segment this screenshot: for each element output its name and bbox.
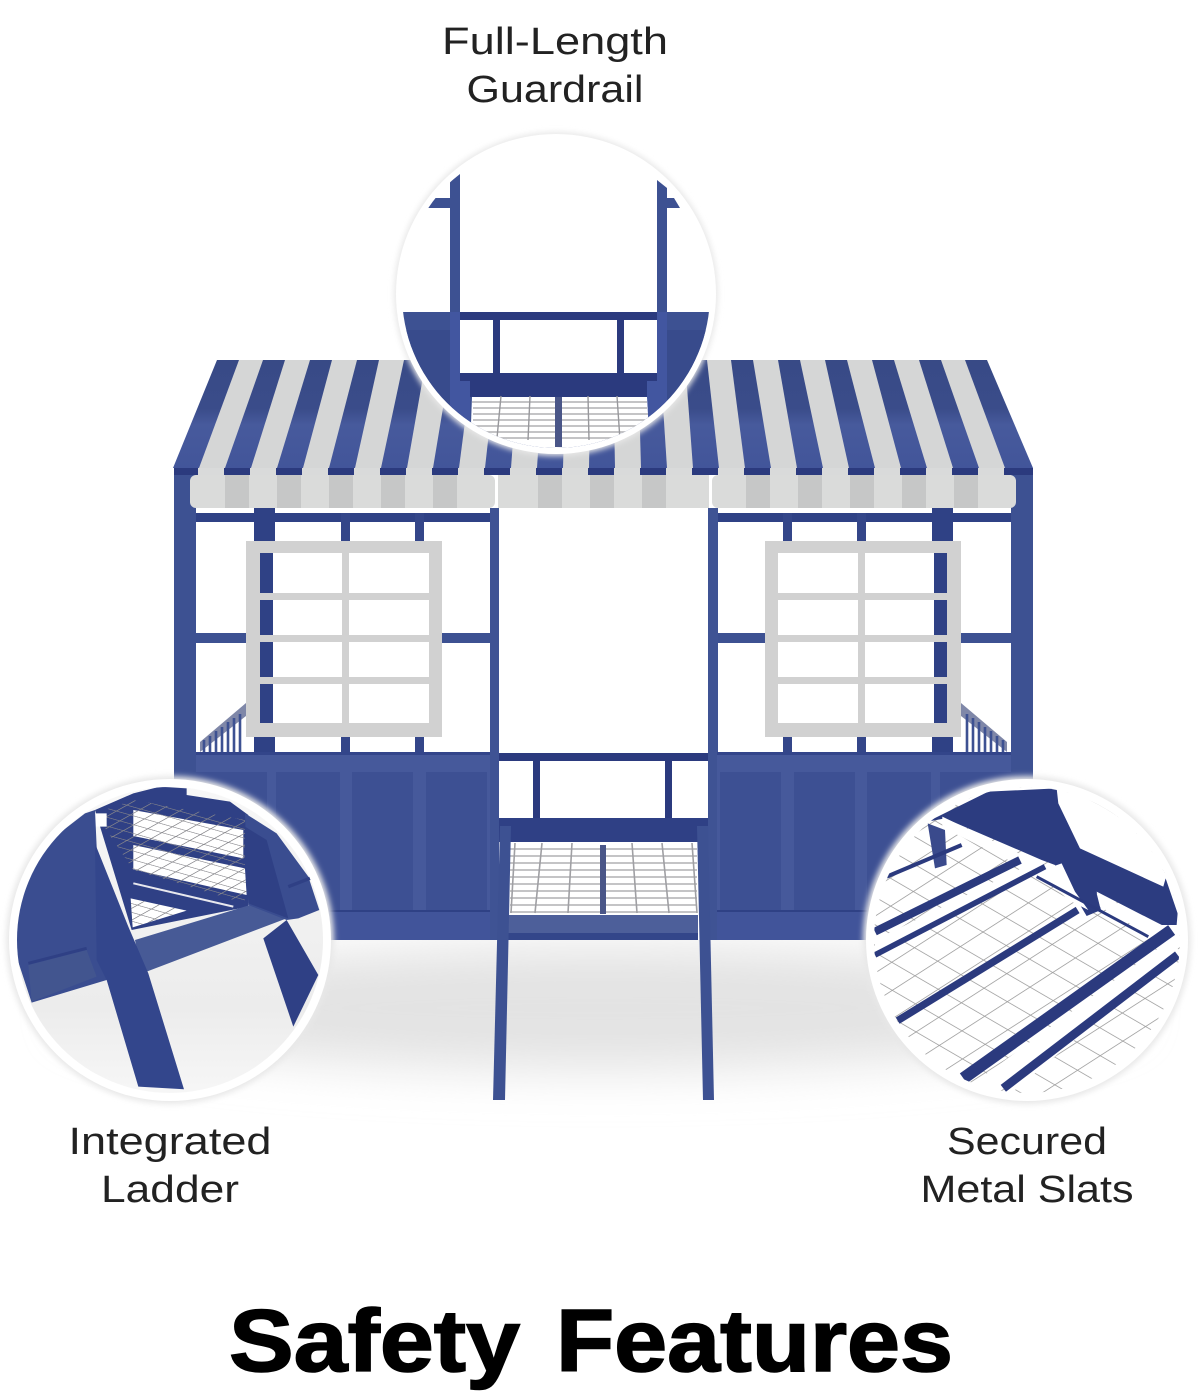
- bed illustration: [173, 360, 1033, 1100]
- side frame: right: [708, 468, 1033, 940]
- center opening and guard rail: [499, 753, 708, 940]
- left panel: [10, 810, 107, 1003]
- callout circle: full-length guardrail: [394, 130, 725, 462]
- front beam: [135, 905, 287, 972]
- label: ladder line: Ladder: [101, 1169, 239, 1211]
- title: Features: [556, 1291, 953, 1390]
- railing right: [961, 703, 1007, 752]
- callout circle: secured metal slats: [863, 775, 1191, 1105]
- title: [229, 1291, 953, 1390]
- label: metal slats: Metal Slats: [920, 1169, 1134, 1211]
- lower panel right: [717, 752, 1011, 940]
- railing: [200, 703, 246, 752]
- right side: [245, 813, 319, 920]
- label: secured: Secured: [947, 1121, 1107, 1163]
- window: left: [246, 541, 442, 737]
- valance: [190, 475, 1016, 508]
- label: integrated ladder: Integrated: [68, 1121, 272, 1163]
- floor shadow: [70, 946, 1130, 1070]
- heading: full-length guardrail: Full-Length: [442, 21, 668, 63]
- side frame: left: [174, 468, 499, 940]
- ladder front rail: [95, 843, 184, 1089]
- roof canopy: [173, 360, 1033, 475]
- heading: guardrail line: Guardrail: [466, 69, 644, 111]
- title: Safety: [229, 1291, 520, 1390]
- window: right: [765, 541, 961, 737]
- lower panel: [196, 752, 490, 940]
- ladder rails: [493, 826, 714, 1100]
- callout circle: integrated ladder: [6, 776, 335, 1105]
- mesh deck: [95, 787, 248, 930]
